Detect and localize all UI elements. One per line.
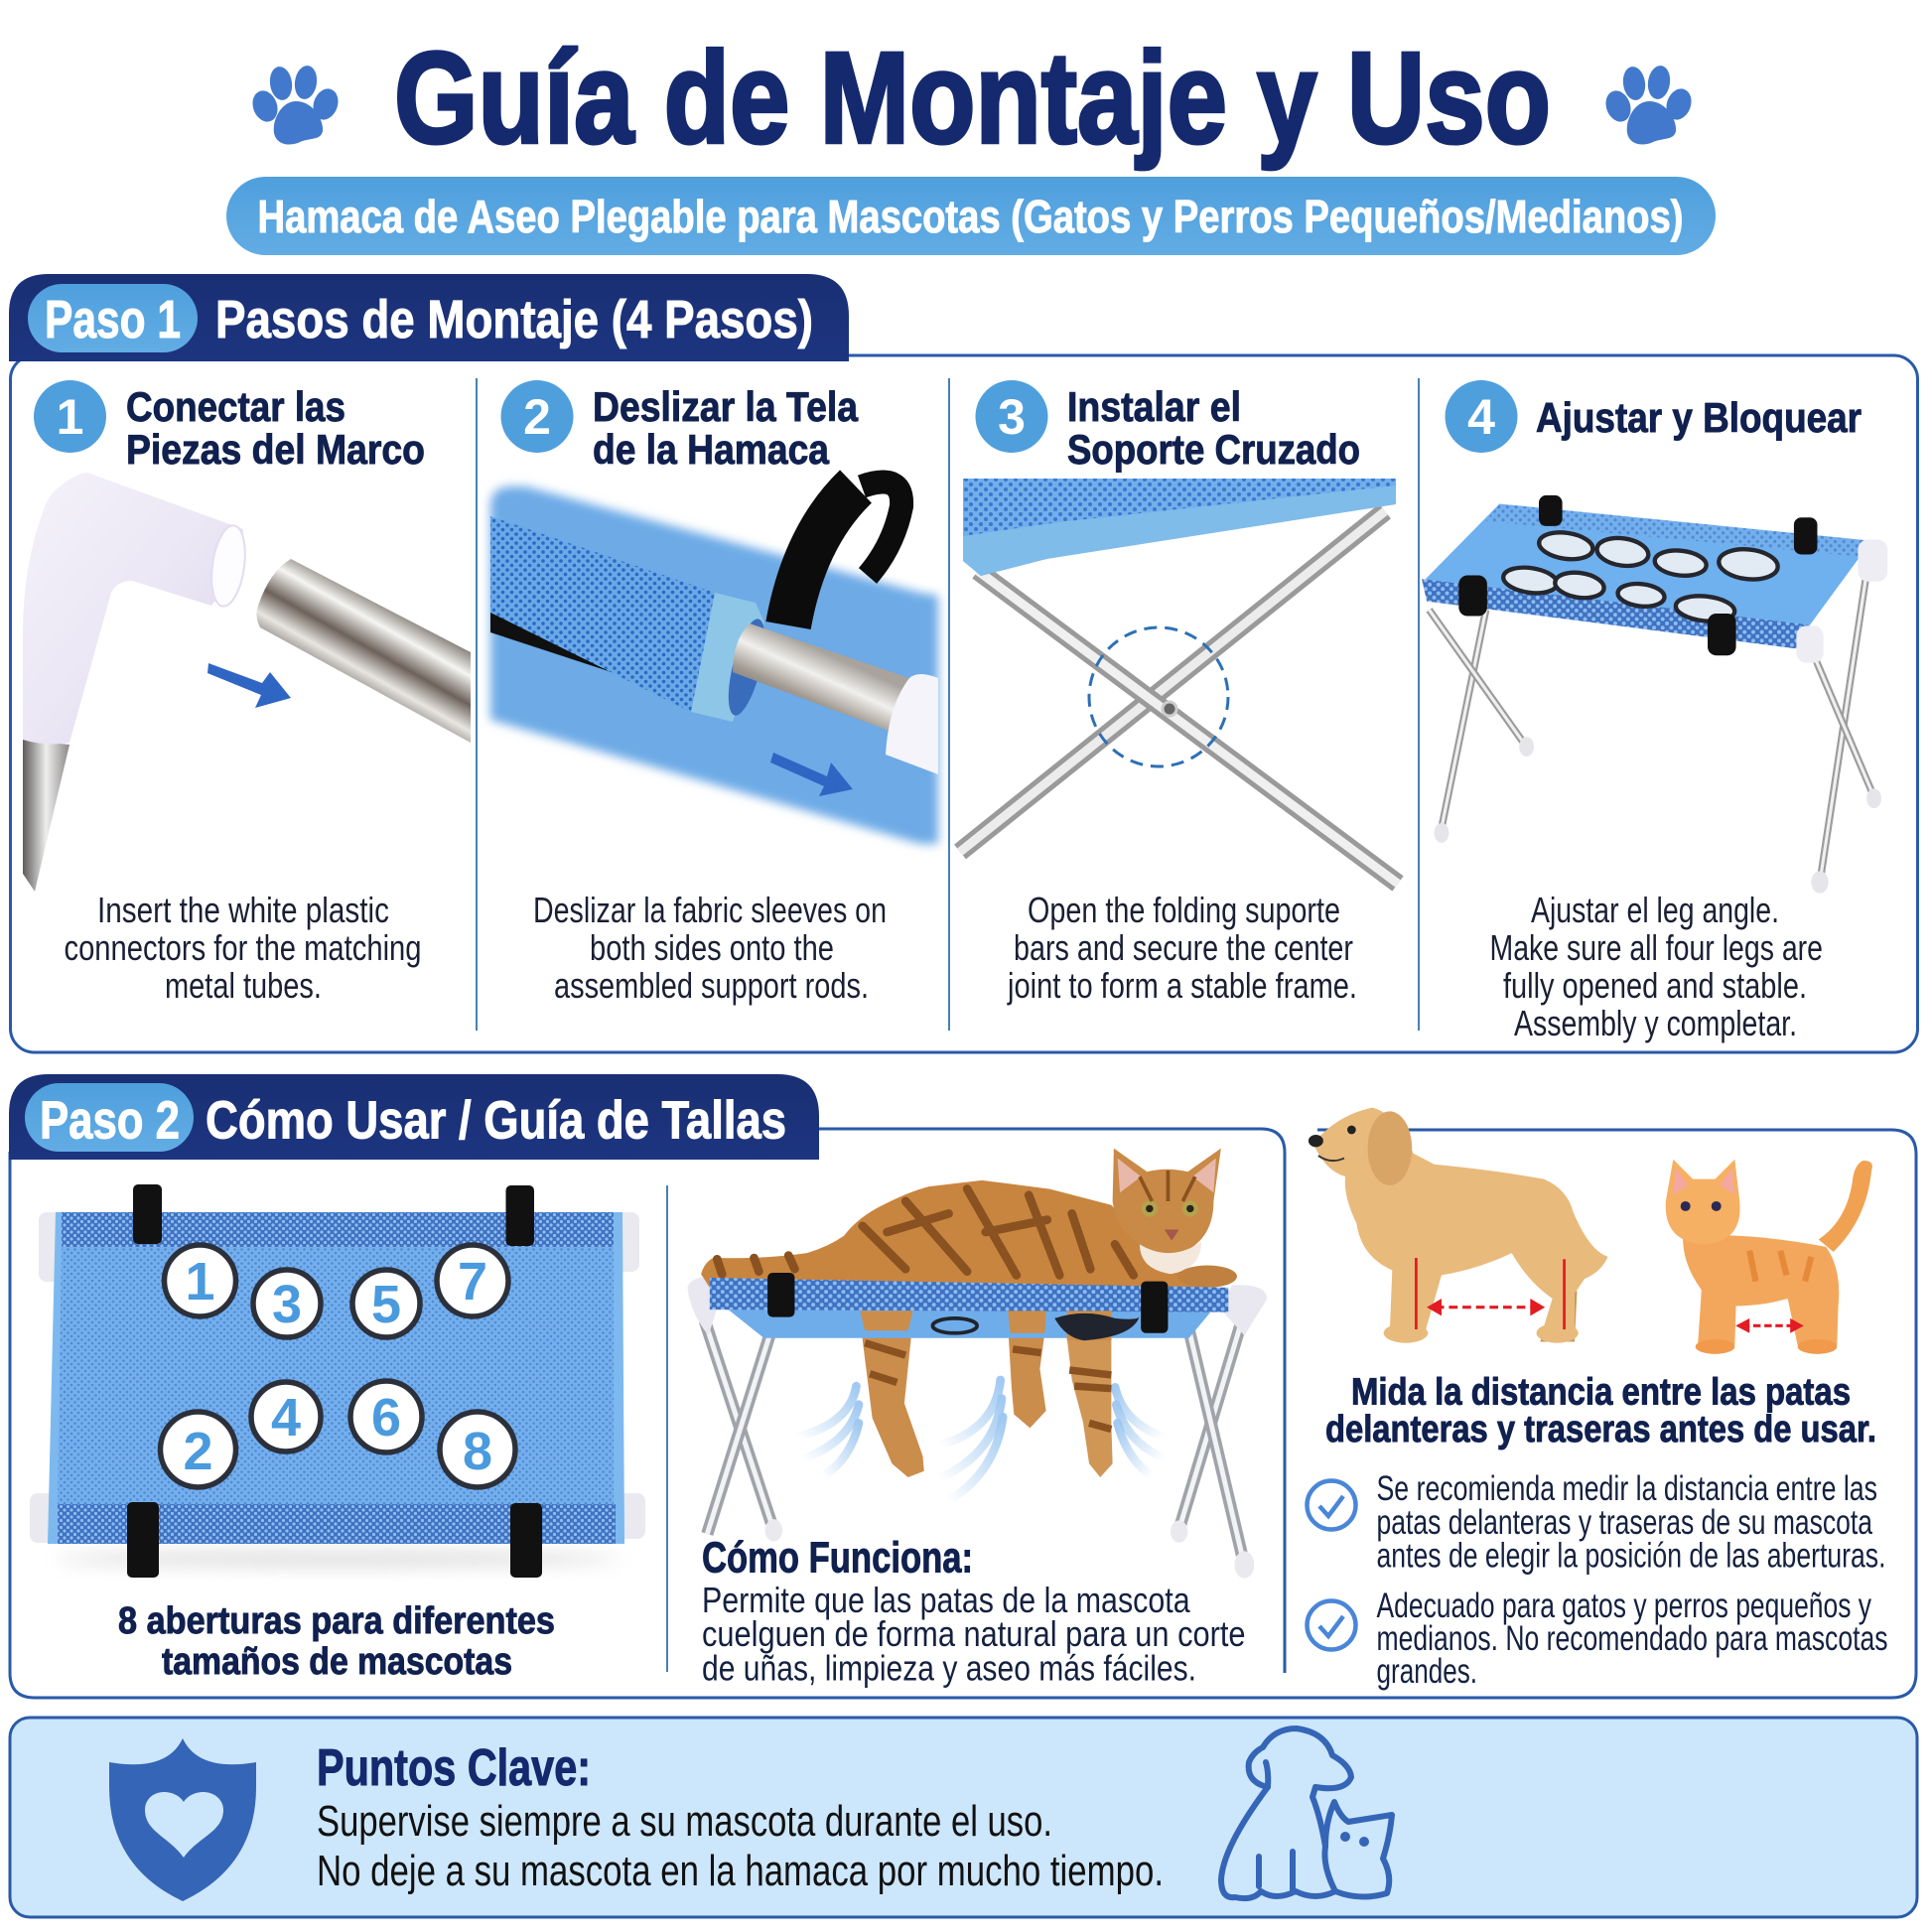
- step 2 heading: Deslizar la Tela: [593, 383, 859, 430]
- panel: key points: [10, 1718, 1917, 1917]
- step number 2: [500, 380, 574, 453]
- section header: Paso 1: [9, 274, 849, 361]
- step 2 description: both sides onto the: [590, 927, 834, 968]
- step number 2: 2: [523, 389, 551, 445]
- how it works text: Cómo Funciona:: [702, 1533, 973, 1583]
- key points text: Supervise siempre a su mascota durante el uso.: [317, 1797, 1052, 1846]
- section header: Paso 2: [9, 1074, 819, 1160]
- step 4 heading: Ajustar y Bloquear: [1536, 394, 1862, 441]
- step 2: [490, 380, 938, 1006]
- step number 1: 1: [57, 389, 83, 445]
- step 1 description: connectors for the matching: [64, 927, 421, 968]
- illustration: sliding fabric sleeve: [490, 483, 938, 844]
- section header: Paso 2: Paso 2: [40, 1090, 180, 1150]
- step 2 heading: [593, 383, 859, 473]
- illustration: top view of hammock with 8 numbered openings: 6: [371, 1388, 401, 1448]
- step 4 description: [1489, 890, 1823, 1043]
- step 1 description: Insert the white plastic: [97, 890, 389, 930]
- illustration: top view of hammock with 8 numbered openings: 4: [271, 1388, 301, 1448]
- step 3 description: joint to form a stable frame.: [1007, 965, 1357, 1006]
- icon: shield with heart: [109, 1738, 256, 1901]
- icon: dog and cat outline: [1221, 1728, 1392, 1898]
- illustration: top view of hammock with 8 numbered openings: 7: [458, 1252, 487, 1311]
- subtitle pill: Hamaca de Aseo Plegable para Mascotas (Gatos y Perros Pequeños/Medianos): [258, 191, 1684, 242]
- section header: Paso 1: Pasos de Montaje (4 Pasos): [215, 290, 813, 349]
- step 1: [23, 380, 471, 1006]
- subtitle pill: [226, 177, 1716, 255]
- illustration: dog with measure arrow: [1309, 1108, 1608, 1343]
- step 3 heading: [1067, 383, 1360, 473]
- caption: 8 openings: tamaños de mascotas: [162, 1641, 512, 1683]
- step 4: [1422, 380, 1887, 1043]
- cat hanging legs: [860, 1319, 924, 1477]
- illustration: top view of hammock with 8 numbered openings: 2: [183, 1422, 213, 1481]
- key points heading: Puntos Clave:: [317, 1739, 591, 1797]
- illustration: cat with measure arrow: [1666, 1160, 1872, 1354]
- illustration: top view of hammock with 8 numbered openings: 5: [371, 1275, 401, 1334]
- caption: 8 openings: 8 aberturas para diferentes: [118, 1600, 555, 1642]
- step 2 description: [533, 890, 887, 1006]
- icon: check 1: [1307, 1481, 1356, 1529]
- bullet text 2: grandes.: [1376, 1652, 1477, 1691]
- illustration: elbow connector and tube: [23, 473, 471, 892]
- step number 3: 3: [998, 389, 1026, 445]
- icon: right paw: [1601, 65, 1696, 145]
- step 3 description: Open the folding suporte: [1028, 890, 1340, 930]
- hammock bar: [727, 1309, 1213, 1338]
- step 1 description: metal tubes.: [165, 965, 322, 1006]
- step 1 heading: Piezas del Marco: [126, 426, 425, 473]
- illustration: top view of hammock with 8 numbered openings: 8: [463, 1422, 492, 1481]
- step 4 description: Ajustar el leg angle.: [1531, 890, 1779, 930]
- step 4 description: fully opened and stable.: [1503, 965, 1807, 1006]
- bullet text 2: [1376, 1587, 1888, 1691]
- panel: assembly steps: [9, 274, 1918, 1052]
- bullet text 1: [1376, 1469, 1886, 1575]
- step 1 heading: Conectar las: [126, 383, 345, 430]
- illustration: cat on hammock: [687, 1149, 1267, 1579]
- step 3 heading: Instalar el: [1067, 383, 1241, 430]
- section header: Paso 2: Cómo Usar / Guía de Tallas: [206, 1090, 786, 1150]
- cat head: [1113, 1149, 1237, 1288]
- key points text: No deje a su mascota en la hamaca por mucho tiempo.: [317, 1847, 1164, 1895]
- measure heading: Mida la distancia entre las patas: [1351, 1372, 1851, 1414]
- step 1 heading: [126, 383, 425, 473]
- air flow arcs: [798, 1380, 1165, 1501]
- step 4 description: Assembly y completar.: [1514, 1003, 1797, 1043]
- how it works text: Permite que las patas de la mascota: [702, 1580, 1190, 1620]
- step number 1: [34, 380, 106, 453]
- illustration: cross support: [960, 479, 1398, 884]
- how it works text: [702, 1533, 1245, 1688]
- measure heading: [1325, 1372, 1876, 1450]
- step 3 description: bars and secure the center: [1014, 927, 1353, 968]
- step number 4: 4: [1467, 389, 1495, 445]
- how it works text: cuelguen de forma natural para un corte: [702, 1613, 1245, 1654]
- step 2 heading: de la Hamaca: [593, 426, 830, 473]
- step 3: [960, 380, 1398, 1006]
- step 4 description: Make sure all four legs are: [1489, 927, 1823, 968]
- step number 3: [975, 380, 1048, 453]
- cat tail, body: [701, 1180, 1201, 1288]
- caption: 8 openings: [118, 1600, 555, 1683]
- step 3 heading: Soporte Cruzado: [1067, 426, 1360, 473]
- frame legs: [705, 1318, 1242, 1555]
- icon: check 2: [1307, 1600, 1356, 1650]
- panel: how to use / size guide: [9, 1074, 1916, 1698]
- step number 4: [1446, 380, 1517, 453]
- step 1 description: [64, 890, 421, 1006]
- key points text: [317, 1797, 1164, 1895]
- section header: Paso 1: Paso 1: [45, 290, 181, 349]
- step 2 description: assembled support rods.: [554, 965, 869, 1006]
- illustration: top view of hammock with 8 numbered openings: [30, 1184, 645, 1578]
- how it works text: de uñas, limpieza y aseo más fáciles.: [702, 1648, 1196, 1688]
- step 2 description: Deslizar la fabric sleeves on: [533, 890, 887, 930]
- step 3 description: [1007, 890, 1357, 1006]
- icon: left paw: [248, 65, 343, 145]
- illustration: top view of hammock with 8 numbered openings: 3: [272, 1275, 302, 1334]
- title: Guía de Montaje y Uso: [394, 24, 1551, 171]
- illustration: assembled hammock: [1422, 495, 1887, 894]
- illustration: top view of hammock with 8 numbered openings: 1: [185, 1252, 215, 1311]
